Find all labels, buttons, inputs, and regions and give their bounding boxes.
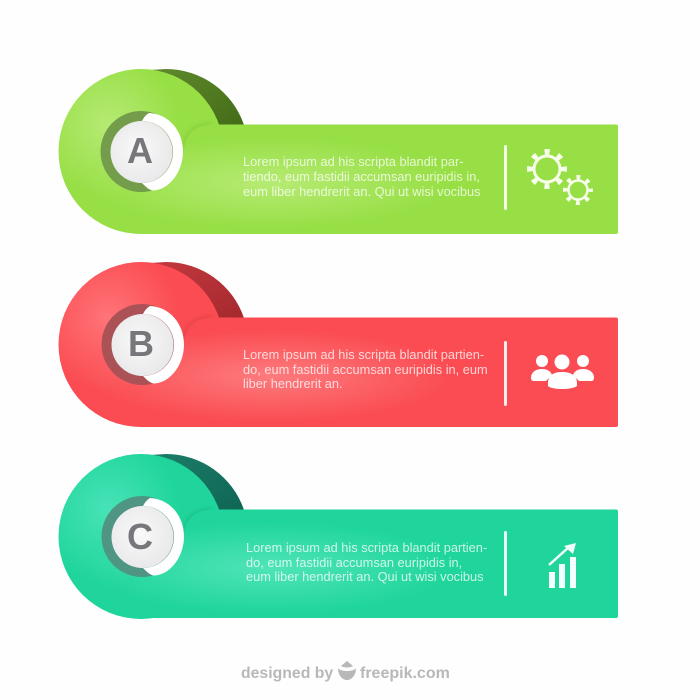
divider B — [504, 341, 507, 406]
bar B — [85, 318, 618, 427]
text C: eum liber hendrerit an. Qui ut wisi vocibus — [246, 569, 484, 584]
divider C — [504, 531, 507, 596]
text A: Lorem ipsum ad his scripta blandit par- — [243, 154, 464, 169]
icon: gears — [530, 152, 590, 202]
bar A — [85, 124, 618, 234]
text B: Lorem ipsum ad his scripta blandit partien- — [243, 347, 484, 362]
icon: people — [531, 354, 594, 389]
watermark: designed by — [241, 665, 333, 682]
text B: do, eum fastidii accumsan euripidis in, eum — [243, 362, 488, 377]
badge B — [102, 304, 184, 385]
badge B: B — [128, 323, 154, 364]
icon: growth chart — [549, 543, 576, 588]
dark crescent B — [150, 262, 244, 318]
badge C: C — [127, 516, 153, 557]
text A: tiendo, eum fastidii accumsan euripidis in, — [243, 169, 480, 184]
text A: eum liber hendrerit an. Qui ut wisi vocibus — [243, 184, 481, 199]
badge C — [102, 496, 184, 577]
text B: liber hendrerit an. — [243, 376, 343, 391]
divider A — [504, 145, 507, 210]
disc B — [58, 262, 224, 427]
badge A: A — [127, 130, 153, 171]
dark crescent A — [150, 69, 244, 125]
disc C — [58, 454, 224, 619]
watermark — [241, 661, 450, 682]
disc A — [58, 69, 224, 234]
bar C — [85, 510, 618, 618]
watermark: freepik.com — [360, 665, 450, 682]
banner C — [58, 454, 618, 619]
text C: Lorem ipsum ad his scripta blandit partien- — [246, 540, 487, 555]
badge A — [100, 111, 183, 192]
text C: do, eum fastidii accumsan euripidis in, — [246, 555, 462, 570]
dark crescent C — [150, 454, 244, 510]
banner B — [58, 262, 618, 427]
banner A — [58, 69, 618, 234]
icon: freepik logo — [338, 661, 356, 680]
